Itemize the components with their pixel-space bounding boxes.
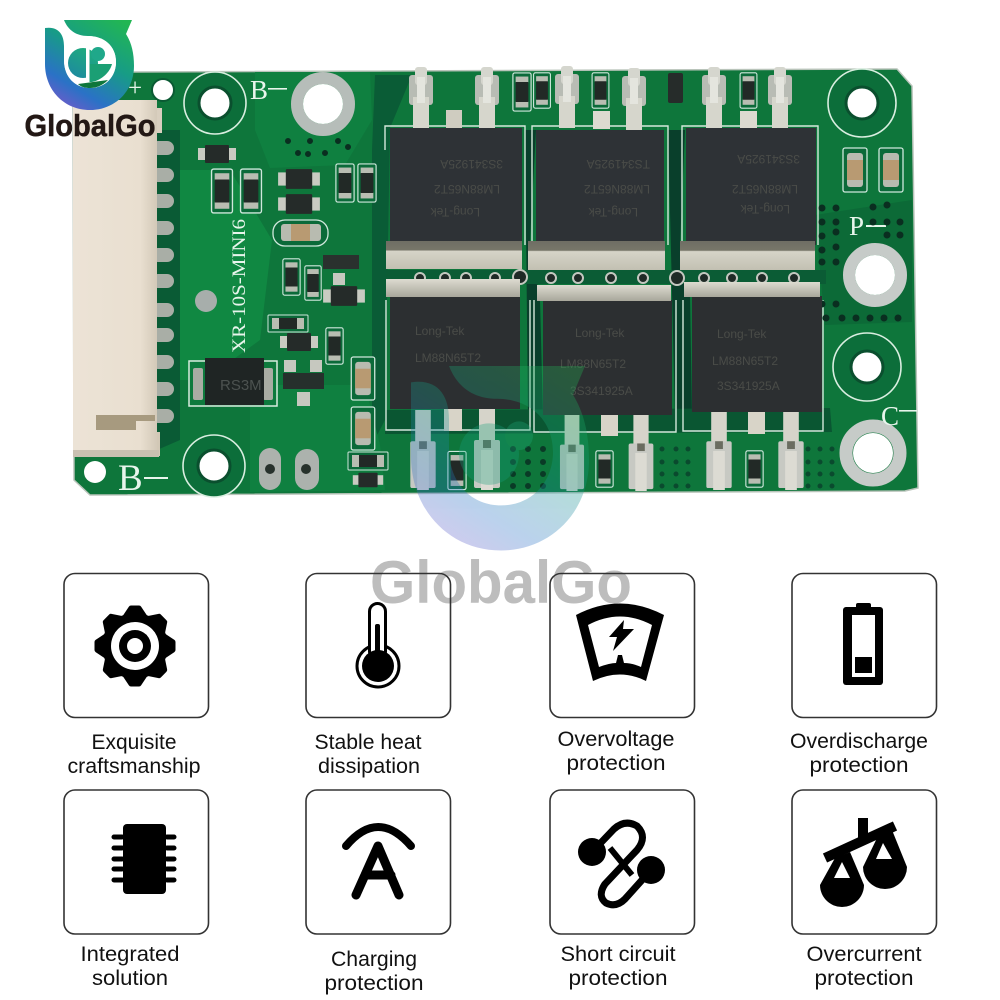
MOSFET top row: Long-Tek	[740, 202, 790, 216]
label: charging protection: protection	[324, 971, 424, 995]
panel: overcurrent protection	[792, 790, 936, 990]
label: overcurrent protection	[806, 942, 922, 990]
silkscreen labels: P	[849, 211, 864, 241]
via and pad row between MOSFETs	[386, 270, 826, 285]
MOSFET top row: LM88N65T2	[434, 182, 500, 196]
panel: short circuit protection	[550, 790, 694, 990]
watermark logo	[411, 366, 589, 550]
copper pour regions	[157, 72, 912, 492]
silkscreen labels: B	[250, 75, 268, 105]
panel: overdischarge protection	[790, 574, 936, 777]
brand name: GlobalGo	[24, 108, 156, 143]
silkscreen labels: B	[118, 458, 143, 499]
MOSFET bottom row: Long-Tek	[415, 324, 465, 338]
MOSFET top row: Long-Tek	[588, 205, 638, 219]
RS3M rectifier diode	[189, 358, 277, 406]
panel: charging protection	[306, 790, 450, 995]
MOSFET top row: TS341925A	[587, 157, 650, 171]
silkscreen labels	[118, 75, 917, 499]
label: exquisite craftsmanship: Exquisite	[92, 730, 176, 754]
watermark brand text: GlobalGo	[370, 549, 632, 616]
label: stable heat dissipation: dissipation	[318, 754, 420, 778]
smd resistors	[212, 73, 763, 490]
label: overcurrent protection: Overcurrent	[806, 942, 922, 966]
MOSFET bottom row: 3S341925A	[570, 384, 633, 398]
panel: exquisite craftsmanship	[64, 574, 208, 778]
label: charging protection: Charging	[331, 947, 417, 971]
label: exquisite craftsmanship	[68, 730, 201, 778]
MOSFET bottom row: Long-Tek	[717, 327, 767, 341]
label: short circuit protection: Short circuit	[560, 942, 676, 966]
silkscreen labels: +	[128, 75, 142, 102]
MOSFET top row: 3S341925A	[737, 152, 800, 166]
label: overvoltage protection: protection	[566, 751, 666, 775]
label: charging protection	[324, 947, 424, 995]
white JST connector	[73, 100, 162, 457]
label: overdischarge protection	[790, 729, 928, 777]
label: stable heat dissipation: Stable heat	[314, 730, 422, 754]
MOSFET bottom row: Long-Tek	[575, 326, 625, 340]
label: integrated solution: solution	[92, 966, 168, 990]
brand logo icon	[45, 20, 134, 110]
icon: gauge with bolt	[576, 604, 664, 681]
smd capacitors	[273, 148, 903, 450]
icon: low battery	[843, 603, 883, 685]
panel: overvoltage protection	[550, 574, 694, 775]
MOSFET top row: Long-Tek	[430, 205, 480, 219]
MOSFET top row: LM88N65T2	[584, 182, 650, 196]
label: overvoltage protection	[558, 727, 674, 775]
connector pins	[158, 148, 167, 416]
icon: short circuit	[578, 823, 665, 905]
product photo: PCB board	[73, 66, 918, 499]
pcb substrate	[73, 69, 918, 495]
top MOSFET leads	[409, 66, 792, 130]
label: short circuit protection	[560, 942, 676, 990]
panel: integrated solution	[64, 790, 208, 990]
label: overcurrent protection: protection	[814, 966, 914, 990]
label: overvoltage protection: Overvoltage	[558, 727, 674, 751]
icon: balance scale	[820, 818, 907, 907]
solder rings	[259, 78, 901, 490]
icon: chip	[114, 824, 174, 894]
MOSFET bottom row: LM88N65T2	[415, 351, 481, 365]
bottom MOSFET leads	[410, 408, 804, 491]
silkscreen labels: XR-10S-MINI6	[229, 219, 250, 353]
label: overdischarge protection: protection	[810, 753, 908, 777]
label: stable heat dissipation	[314, 730, 422, 778]
label: overdischarge protection: Overdischarge	[790, 729, 928, 753]
silkscreen labels: C	[881, 401, 899, 431]
MOSFET bottom row: LM88N65T2	[560, 357, 626, 371]
RS3M rectifier diode: RS3M	[220, 377, 262, 394]
label: integrated solution: Integrated	[80, 942, 180, 966]
label: exquisite craftsmanship: craftsmanship	[68, 754, 201, 778]
mounting holes	[84, 69, 901, 497]
icon: ampere arc	[346, 827, 411, 895]
MOSFET top row: 3S341925A	[440, 157, 503, 171]
label: integrated solution	[80, 942, 180, 990]
smd diodes and transistors	[198, 73, 683, 487]
MOSFET top row	[386, 128, 816, 270]
MOSFET top row: LM88N65T2	[732, 182, 798, 196]
icon: gear	[97, 608, 173, 684]
MOSFET bottom row	[386, 279, 822, 415]
label: short circuit protection: protection	[568, 966, 668, 990]
silkscreen MOSFET outlines	[385, 126, 823, 432]
icon: thermometer	[357, 604, 399, 687]
via field	[288, 141, 900, 486]
MOSFET bottom row: LM88N65T2	[712, 354, 778, 368]
MOSFET bottom row: 3S341925A	[717, 379, 780, 393]
panel: stable heat dissipation	[306, 574, 450, 778]
